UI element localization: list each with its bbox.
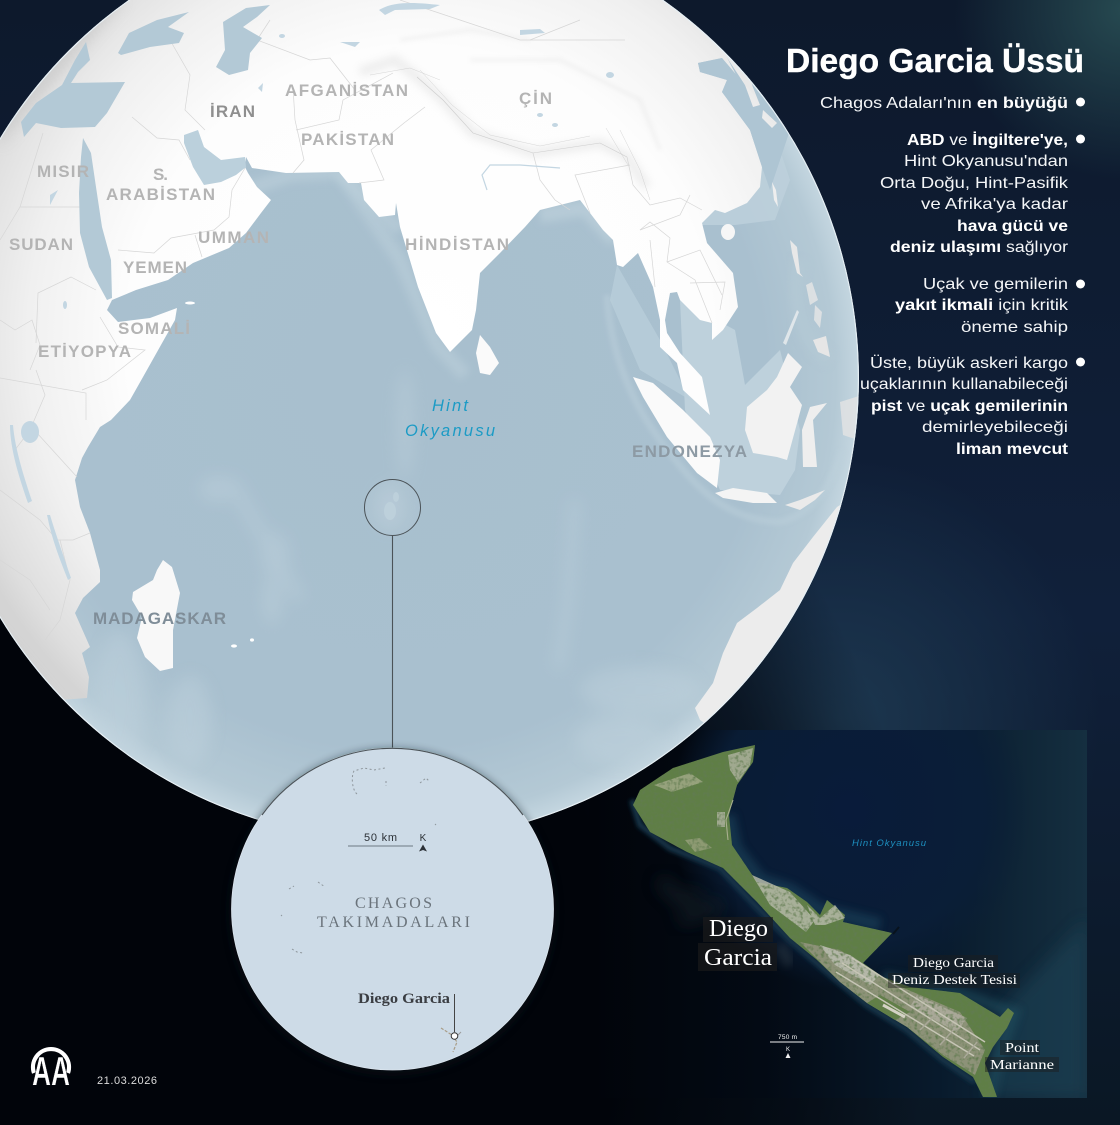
diego garcia callout <box>358 991 458 1039</box>
label: Point Marianne: Point <box>1005 1040 1039 1055</box>
bullet 2: Hint Okyanusu'ndan <box>904 153 1068 170</box>
Korea, Japan and islands <box>132 28 859 723</box>
bullet 3 <box>895 276 1085 336</box>
atolls <box>281 768 436 953</box>
country labels: ÇİN <box>519 89 552 108</box>
logo: AA <box>32 1048 70 1094</box>
country labels: PAKİSTAN <box>301 130 394 149</box>
satellite scale <box>770 1034 804 1058</box>
bullet 2 <box>880 131 1085 256</box>
locator circle and leader line <box>364 480 420 748</box>
label: Point Marianne <box>985 1040 1059 1072</box>
bullet 3: öneme sahip <box>961 319 1068 336</box>
country labels: MISIR <box>37 162 89 181</box>
country labels: YEMEN <box>123 258 187 277</box>
label: naval support facility <box>888 955 1020 988</box>
ocean label <box>405 397 495 440</box>
label: Diego Garcia <box>698 916 777 971</box>
Diego Garcia atoll marker <box>441 1028 457 1052</box>
vegetation and terrain noise <box>633 745 1014 1097</box>
satellite scale: 750 m <box>778 1034 797 1041</box>
runway zone <box>800 942 985 1075</box>
built-up areas <box>717 748 845 932</box>
chagos label: CHAGOS <box>355 895 432 912</box>
ocean ridges and shelves <box>95 120 842 770</box>
bullet 4: liman mevcut <box>956 441 1069 458</box>
inset shadow <box>228 748 556 1076</box>
label: Diego Garcia: Garcia <box>704 945 772 971</box>
logo: AA: AA <box>32 1048 70 1094</box>
bullet 2: hava gücü ve <box>957 218 1068 235</box>
bullet 2: deniz ulaşımı sağlıyor <box>890 239 1069 256</box>
country labels: ENDONEZYA <box>632 442 747 461</box>
north arrow <box>419 833 427 852</box>
chagos label <box>317 895 470 931</box>
reef <box>632 800 975 1082</box>
scale bar: 50 km <box>364 832 397 844</box>
globe rim <box>0 0 858 840</box>
landmass: Africa, Arabia and Asia <box>0 0 790 720</box>
country labels: UMMAN <box>198 228 269 247</box>
diego garcia callout: Diego Garcia <box>358 991 451 1007</box>
island <box>633 745 1014 1097</box>
country labels: ETİYOPYA <box>38 342 131 361</box>
Hint Okyanusu label: Hint Okyanusu <box>852 838 927 849</box>
seas <box>21 5 790 300</box>
bullet 4: demirleyebileceği <box>922 419 1068 436</box>
label: Point Marianne: Marianne <box>990 1057 1054 1072</box>
country labels: S. <box>153 165 168 184</box>
bullet 4: uçaklarının kullanabileceği <box>860 376 1068 393</box>
text block: bullet points <box>820 95 1085 458</box>
north arrow: K <box>420 833 427 844</box>
land shading near rim <box>2 10 118 137</box>
bullet 2: Orta Doğu, Hint-Pasifik <box>880 175 1069 192</box>
rivers and lakes <box>10 3 614 580</box>
label: naval support facility: Deniz Destek Tesisi <box>892 972 1017 987</box>
country labels: AFGANİSTAN <box>285 81 408 100</box>
ocean label: Hint <box>432 397 469 415</box>
title: Diego Garcia Üssü <box>786 42 1084 79</box>
bullet 4: Üste, büyük askeri kargo <box>870 354 1068 372</box>
label: naval support facility: Diego Garcia <box>913 955 994 970</box>
bullet 2: ABD ve İngiltere'ye, <box>907 131 1068 149</box>
bullet 2: ve Afrika'ya kadar <box>921 196 1069 213</box>
country labels: ARABİSTAN <box>106 185 215 204</box>
country labels: SOMALİ <box>118 319 190 338</box>
bullet 4 <box>860 354 1085 458</box>
date: 21.03.2026 <box>97 1075 157 1087</box>
globe map <box>0 0 900 841</box>
bullet 1: Chagos Adaları'nın en büyüğü <box>820 95 1068 112</box>
country labels: MADAGASKAR <box>93 609 226 628</box>
satellite scale: K <box>786 1047 790 1053</box>
scale bar <box>348 832 413 846</box>
country labels: HİNDİSTAN <box>405 235 509 254</box>
bullet 3: yakıt ikmali için kritik <box>895 297 1069 314</box>
country labels: İRAN <box>210 102 255 121</box>
country labels: SUDAN <box>9 235 73 254</box>
label: Diego Garcia: Diego <box>709 916 768 942</box>
satellite map <box>589 730 1087 1098</box>
country labels <box>9 81 747 628</box>
ocean label: Okyanusu <box>405 422 495 440</box>
chagos label: TAKIMADALARI <box>317 914 470 931</box>
national borders <box>0 0 780 640</box>
inset map: Chagos <box>232 748 554 1070</box>
terrain: Himalaya and plateau <box>362 56 650 200</box>
bullet 3: Uçak ve gemilerin <box>923 276 1068 293</box>
bullet 4: pist ve uçak gemilerinin <box>871 398 1068 415</box>
